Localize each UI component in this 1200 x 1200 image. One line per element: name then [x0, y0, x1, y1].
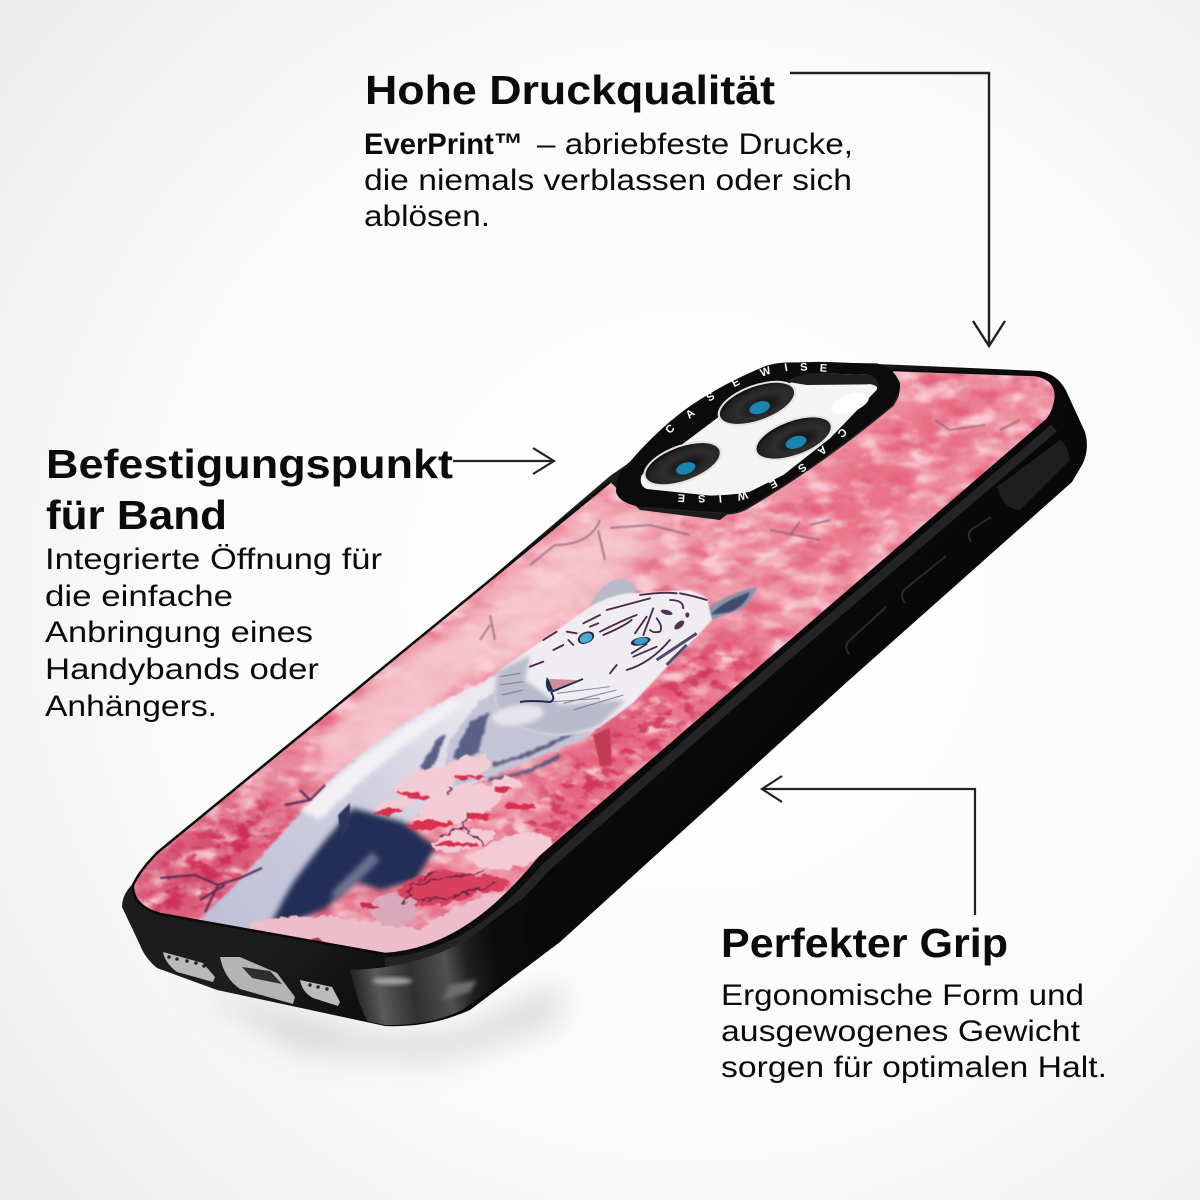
lower pale ground: [248, 892, 506, 953]
tiger flank: [201, 672, 598, 928]
red blossom texture: [120, 360, 1070, 960]
description: – abriebfeste Drucke,: [537, 128, 853, 161]
bumper brand text: W: [759, 365, 773, 380]
dark window lip: [710, 373, 879, 418]
upper lens: [712, 372, 802, 435]
pale blossom texture: [120, 360, 1070, 960]
case body: [122, 362, 1087, 1026]
eye sockets: [578, 631, 650, 646]
description: Ergonomische Form und: [721, 979, 1084, 1012]
pale bright band under the camera: [456, 498, 664, 685]
pale blossom mass left of tiger: [312, 628, 478, 776]
tiger shoulder stripes: [420, 712, 490, 772]
heading: [46, 441, 453, 538]
callout: strap attachment: [45, 441, 453, 723]
rubber corner highlight: [350, 900, 530, 1025]
description: Handybands oder: [45, 653, 319, 686]
phone case: [119, 360, 1087, 1026]
tiger flank highlight: [300, 700, 468, 820]
bumper lower bevel: [643, 395, 898, 514]
arrow: grip: [762, 776, 975, 915]
phone shadow: [190, 985, 560, 1060]
description: die niemals verblassen oder sich: [364, 164, 852, 197]
saturated red zones: [135, 396, 985, 916]
bumper brand text: E: [819, 362, 827, 375]
tiger right ear: [705, 587, 757, 620]
tiger ear inner: [710, 592, 750, 615]
bumper brand text: [664, 361, 849, 504]
whiskers: [500, 673, 623, 710]
pale tree crowns: [375, 751, 556, 877]
small lower red accents: [307, 904, 379, 944]
camera bumper: [616, 361, 900, 514]
tiger head: [494, 590, 712, 736]
tiger chin: [491, 701, 545, 729]
corner sheen: [372, 978, 412, 984]
bumper brand text: I: [784, 362, 789, 374]
callout: print quality: [364, 67, 853, 233]
tiger cheek shade: [494, 655, 625, 735]
side inner bevel band: [385, 428, 1054, 962]
description: Integrierte Öffnung für: [45, 543, 382, 576]
flank fold mark: [338, 803, 350, 838]
corner second sheen: [442, 980, 477, 1000]
red blossom undersides: [374, 775, 537, 847]
bumper brand text: E: [730, 376, 742, 390]
bumper outer: [616, 362, 900, 514]
arrow: print quality: [790, 73, 1005, 346]
bumper brand text: S: [800, 361, 808, 374]
USB port: [220, 957, 295, 1004]
description: sorgen für optimalen Halt.: [721, 1051, 1107, 1084]
side grip bump: [997, 440, 1070, 510]
bumper brand text: C: [664, 422, 677, 437]
description: Anbringung eines: [45, 616, 313, 649]
tiger left ear: [590, 578, 636, 606]
bumper brand text: S: [795, 460, 808, 474]
right speaker grille: [300, 980, 340, 1006]
bumper brand text: C: [835, 425, 849, 439]
description: [364, 128, 853, 233]
arrow: strap attachment: [453, 448, 554, 474]
bare branches: [480, 420, 1020, 640]
face rim: [133, 370, 1056, 954]
grey mist inside navy: [332, 852, 380, 900]
description: [721, 979, 1107, 1084]
description: ausgewogenes Gewicht: [721, 1015, 1081, 1048]
heading: für Band: [46, 492, 227, 538]
description: [45, 543, 382, 723]
tiger nose dark side: [546, 677, 553, 692]
deep red lower blossoms: [134, 634, 763, 919]
tiger body and lower scene: [201, 672, 598, 928]
left lens: [637, 432, 728, 495]
description: Anhängers.: [45, 690, 217, 723]
flash: [828, 388, 872, 418]
description: die einfache: [45, 580, 233, 613]
bumper brand text: S: [698, 492, 705, 504]
chest shade: [444, 693, 591, 788]
lower red tree: [397, 868, 510, 908]
heading: Perfekter Grip: [721, 920, 1008, 966]
tiger left eye: [580, 633, 592, 643]
bumper brand text: E: [767, 476, 779, 490]
lower left dark tree: [160, 785, 325, 912]
heading: Hohe Druckqualität: [365, 67, 775, 113]
bumper brand text: A: [815, 443, 829, 457]
tiger face markings: [500, 593, 707, 710]
camera window: [641, 373, 877, 496]
left speaker grille: [163, 952, 215, 982]
right lens: [748, 406, 839, 470]
dark neck ruff: [657, 633, 697, 665]
foreground blossom tree and lower foliage: [248, 754, 552, 953]
dark branches: [403, 787, 497, 907]
bumper brand text: S: [704, 390, 717, 404]
description: EverPrint™: [364, 128, 523, 161]
red trunk right of tiger: [593, 728, 612, 766]
bumper brand text: E: [677, 491, 686, 504]
heading: Befestigungspunkt: [46, 441, 453, 487]
tiger right eye: [634, 638, 648, 644]
printed back panel: [119, 360, 1070, 968]
tiger navy underside: [268, 808, 436, 930]
blossom base: [120, 360, 1070, 960]
plum stripes: [530, 593, 707, 673]
tiger mouth: [520, 679, 583, 702]
bumper brand text: W: [735, 488, 749, 503]
side buttons: [846, 517, 991, 654]
thick forehead blotches: [660, 610, 690, 630]
description: ablösen.: [364, 200, 490, 233]
bumper brand text: A: [684, 407, 697, 421]
tiger nose: [549, 679, 577, 691]
callout: grip: [721, 920, 1107, 1084]
chest stripes: [486, 734, 574, 783]
lower pale grey blossom: [370, 893, 417, 927]
bumper brand text: I: [718, 492, 722, 504]
